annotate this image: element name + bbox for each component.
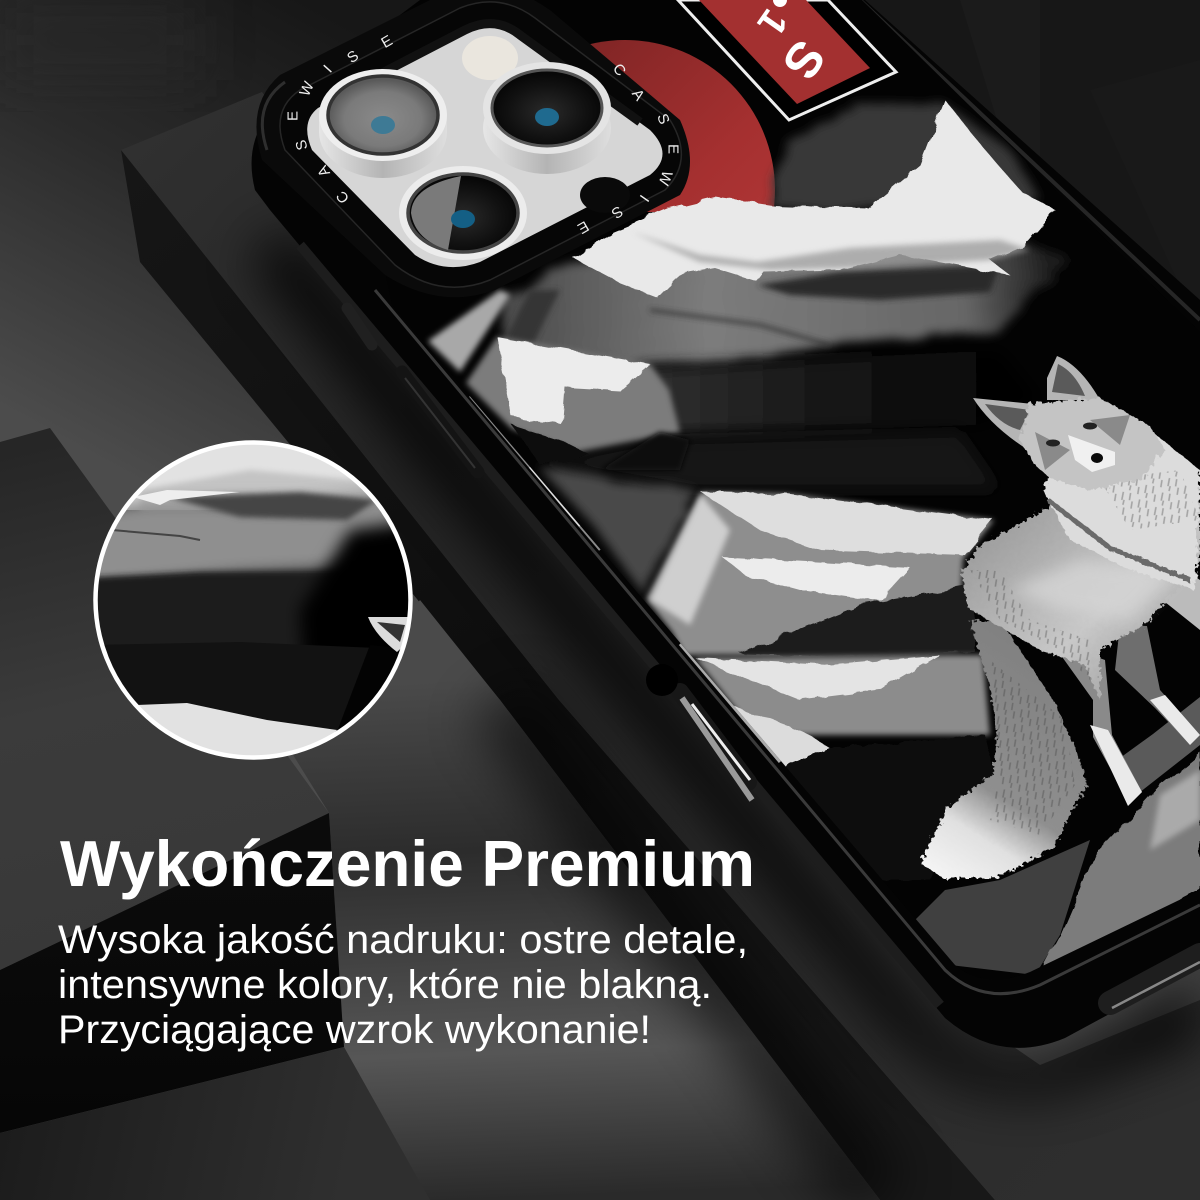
- fox front leg: [1115, 560, 1200, 745]
- phone: [250, 0, 1200, 1100]
- camera bumper: [256, 0, 690, 297]
- description text: [58, 918, 748, 1052]
- fox hind leg: [1062, 657, 1142, 806]
- red label: [678, 0, 896, 120]
- title: Wykończenie Premium: [60, 827, 755, 900]
- brand ring text: S: [653, 111, 673, 127]
- brand ring text: I: [320, 62, 336, 76]
- fox tail: [920, 620, 1087, 878]
- brand ring text: C: [333, 187, 353, 207]
- brand ring text: A: [628, 86, 648, 104]
- red sun: [590, 40, 775, 212]
- camera glass: [307, 24, 662, 267]
- brand ring text: [284, 32, 682, 237]
- brand ring text: S: [344, 47, 362, 67]
- camera island: [256, 0, 690, 297]
- brand ring text: I: [636, 191, 652, 205]
- block: platform dark face: [121, 150, 995, 1200]
- dark wash: [654, 350, 976, 436]
- brand ring text: W: [654, 168, 675, 188]
- brand ring text: S: [292, 138, 312, 152]
- phone artwork: [401, 0, 1200, 974]
- brand ring text: E: [284, 111, 302, 121]
- lens 3: [399, 166, 527, 260]
- phone drop shadow: [250, 230, 1200, 1094]
- brand ring text: E: [378, 32, 396, 52]
- snow peak: [573, 100, 1055, 297]
- mid mountain: [646, 492, 994, 656]
- lens 1: [319, 69, 447, 178]
- description text: Wysoka jakość nadruku: ostre detale,: [58, 918, 748, 962]
- brand ring text: S: [608, 202, 626, 222]
- fox head: [1020, 398, 1165, 490]
- phone side buttons: [347, 308, 1200, 1008]
- gray wash bands: [500, 240, 1070, 365]
- phone edge glints: [470, 396, 780, 762]
- small mountain: [466, 337, 690, 470]
- brand ring text: C: [609, 60, 629, 80]
- phone body: [252, 0, 1200, 1048]
- lens 2: [483, 62, 611, 174]
- brand ring text: W: [296, 78, 318, 99]
- fox: [920, 356, 1200, 878]
- brand ring text: E: [664, 144, 682, 154]
- magnifier circle: [80, 440, 420, 770]
- flash: [462, 36, 518, 80]
- block: lower left: [0, 428, 880, 1200]
- upper dark wash: [772, 100, 1040, 210]
- low mountain: [695, 655, 1000, 880]
- fox ruff: [1043, 430, 1200, 590]
- description text: Przyciągające wzrok wykonanie!: [58, 1008, 651, 1052]
- fox body: [962, 470, 1200, 700]
- lidar: [580, 177, 630, 213]
- red label: 1: [749, 1, 795, 43]
- red label: S: [771, 30, 837, 90]
- brand ring text: E: [574, 217, 592, 237]
- rocks: [910, 697, 1200, 975]
- brand ring text: A: [314, 162, 334, 180]
- slanted pale strip: [428, 290, 510, 372]
- camera ring: [280, 2, 681, 287]
- fox ears: [973, 356, 1100, 448]
- description text: intensywne kolory, które nie blakną.: [58, 963, 712, 1007]
